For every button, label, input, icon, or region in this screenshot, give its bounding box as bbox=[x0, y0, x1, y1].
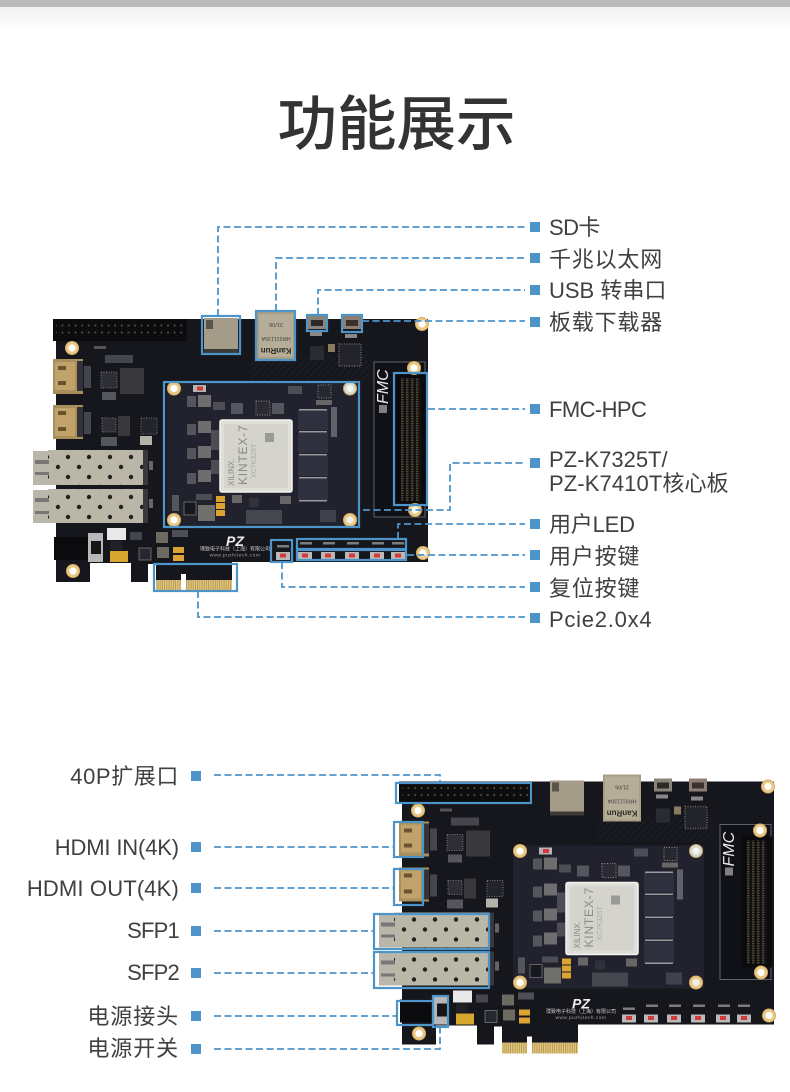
callout: SFP2: SFP2 bbox=[127, 960, 180, 985]
board photo: front view bbox=[33, 312, 430, 591]
HDMI connectors bbox=[53, 359, 83, 394]
callout: PCIe bbox=[154, 564, 652, 632]
top faded band bbox=[0, 0, 790, 31]
callout: core board bbox=[164, 382, 729, 527]
micro USB bbox=[308, 316, 326, 329]
callout: gigabit ethernet: 千兆以太网 bbox=[549, 247, 663, 272]
callout: user button: 用户按键 bbox=[549, 544, 640, 569]
callout: onboard programmer: 板载下载器 bbox=[549, 310, 663, 335]
DDR memory bbox=[298, 410, 328, 500]
callout: power jack: 电源接头 bbox=[87, 1004, 179, 1029]
board photo: front view: 璞致电子科技（上海）有限公司 bbox=[200, 546, 270, 552]
board photo: front view: FMC bbox=[375, 369, 392, 404]
PCIe gold fingers bbox=[156, 580, 181, 591]
callout: gigabit ethernet bbox=[256, 247, 663, 360]
core module bbox=[167, 383, 358, 526]
callout: 40P expansion bbox=[70, 764, 531, 803]
callout: FMC-HPC: FMC-HPC bbox=[549, 397, 647, 422]
FPGA chip bbox=[220, 420, 292, 492]
SFP cages bbox=[33, 451, 48, 485]
board photo: front view: XILINX. bbox=[227, 458, 236, 486]
callout: FMC-HPC bbox=[394, 373, 647, 505]
callout: power jack bbox=[87, 1001, 433, 1029]
logo: PZ bbox=[226, 533, 244, 549]
board photo: front view: www.puzhitech.com bbox=[210, 552, 260, 558]
callout: user button bbox=[297, 544, 640, 569]
callout: HDMI IN bbox=[55, 822, 423, 860]
callout: USB to UART bbox=[307, 278, 666, 331]
40-pin header bbox=[53, 319, 187, 341]
board photo: front view: 21/06 bbox=[269, 321, 283, 327]
LEDs and buttons bbox=[276, 552, 405, 560]
callout: HDMI OUT bbox=[27, 869, 423, 905]
callout: power switch bbox=[87, 996, 448, 1061]
callout: core board: PZ-K7410T核心板 bbox=[549, 471, 729, 496]
callout: HDMI OUT: HDMI OUT(4K) bbox=[27, 876, 179, 901]
callout: SFP1: SFP1 bbox=[127, 918, 180, 943]
callout: SFP2 bbox=[127, 952, 489, 988]
callout: SD card bbox=[202, 215, 600, 354]
RJ45 bbox=[257, 312, 295, 359]
callout: user LED: 用户LED bbox=[549, 512, 635, 537]
board photo: front view: XC7K325T bbox=[251, 443, 258, 478]
board photo: front view: KINTEX-7 bbox=[236, 425, 250, 485]
callout: onboard programmer bbox=[342, 310, 663, 335]
SD slot bbox=[204, 318, 238, 353]
board photo: front view: KanRun bbox=[261, 346, 291, 355]
callout: USB to UART: USB 转串口 bbox=[549, 278, 666, 303]
board ICs bbox=[310, 346, 324, 360]
callout: reset button bbox=[271, 540, 640, 601]
power section bbox=[54, 537, 88, 560]
callout: PCIe: Pcie2.0x4 bbox=[549, 607, 652, 632]
board photo: rear ports view bbox=[379, 774, 776, 1054]
callout: SD card: SD卡 bbox=[549, 215, 600, 240]
callout: HDMI IN: HDMI IN(4K) bbox=[55, 835, 179, 860]
board photo: front view: HR911130A bbox=[261, 335, 291, 341]
FMC area bbox=[374, 362, 425, 517]
callout: user LED bbox=[297, 512, 635, 549]
mounting holes bbox=[168, 382, 180, 395]
callout: power switch: 电源开关 bbox=[87, 1036, 179, 1061]
callout: SFP1 bbox=[127, 914, 489, 949]
title: 功能展示 bbox=[278, 91, 516, 158]
callout: reset button: 复位按键 bbox=[549, 576, 640, 601]
callout: core board: PZ-K7325T/ bbox=[549, 447, 668, 472]
callout: 40P expansion: 40P扩展口 bbox=[70, 764, 179, 789]
